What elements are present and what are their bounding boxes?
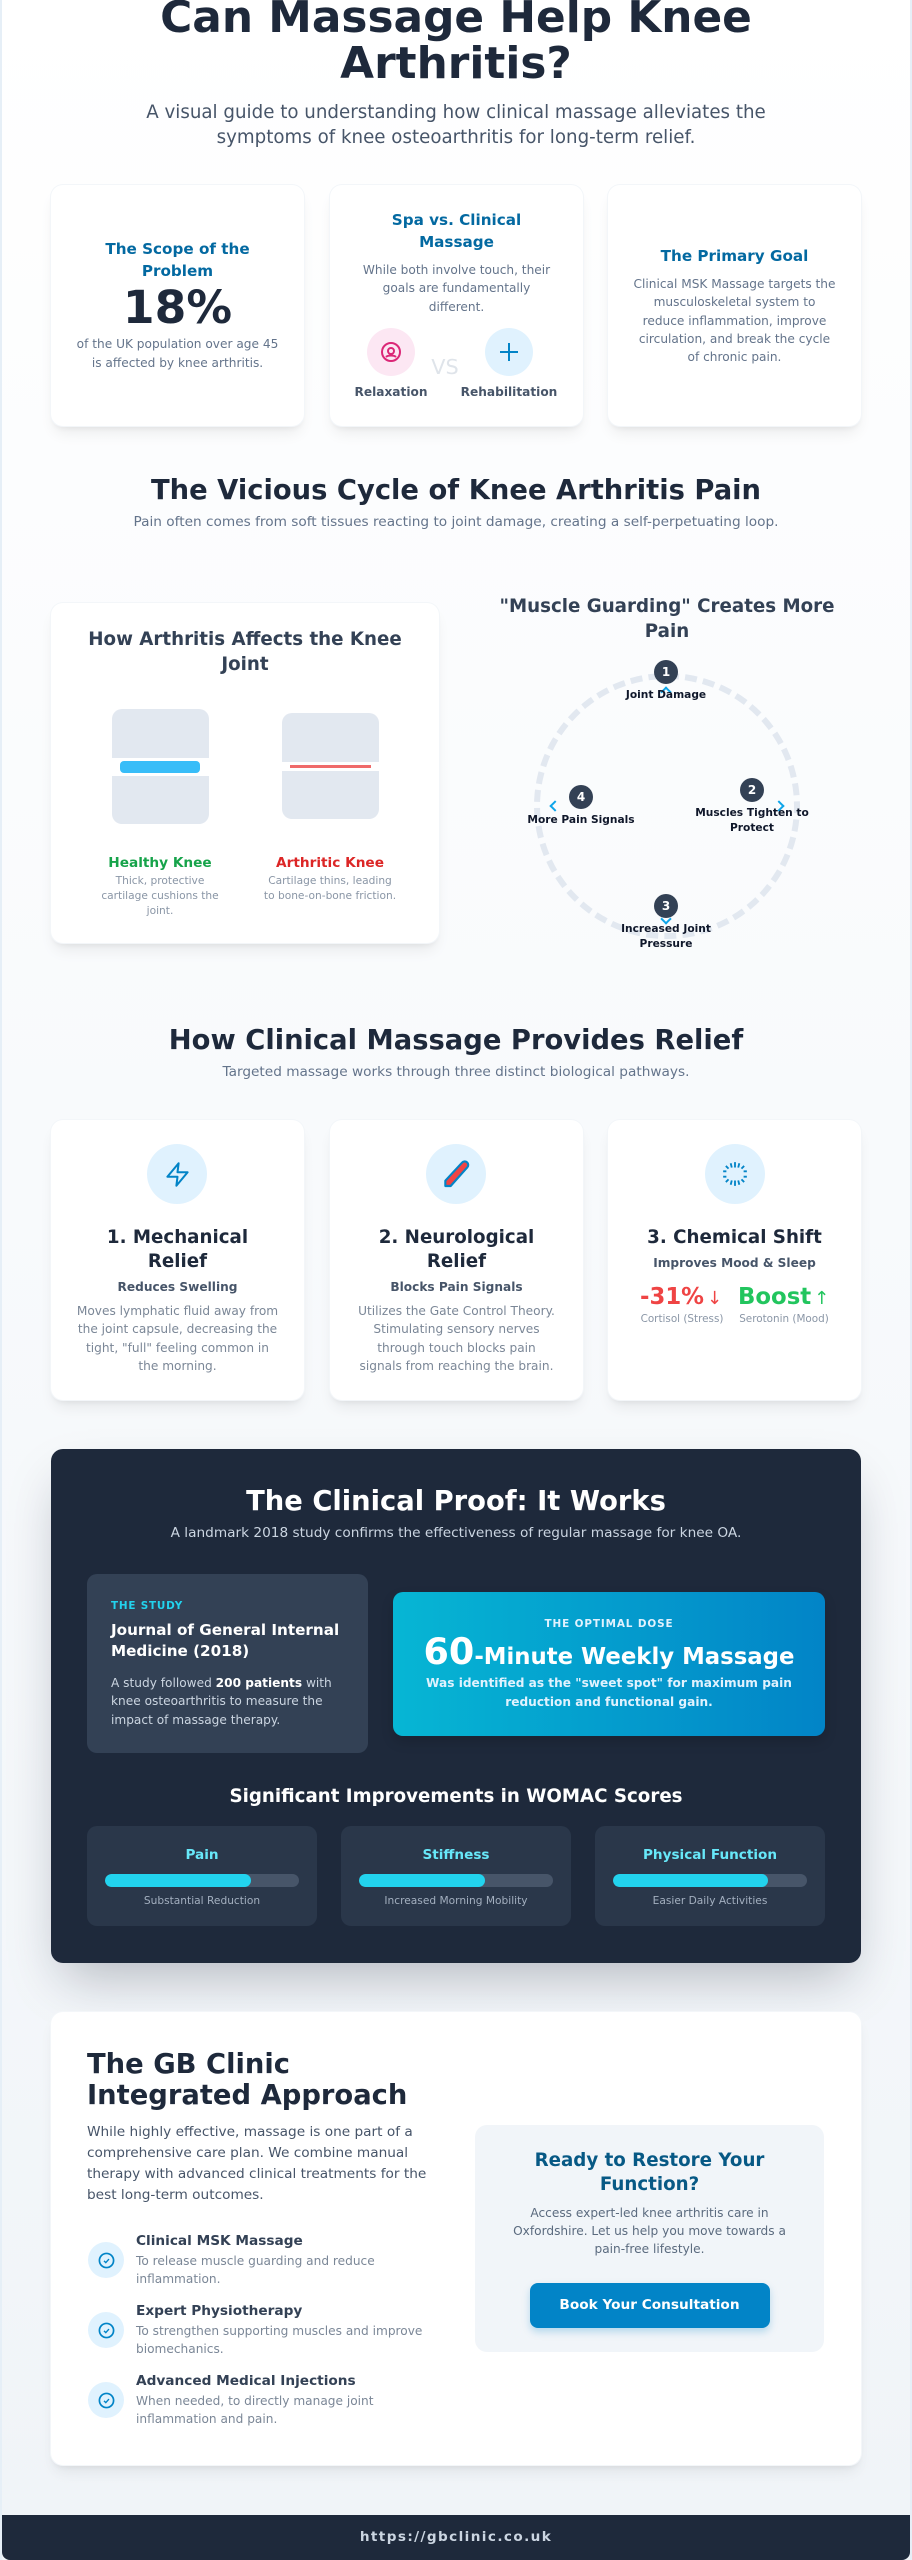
text: goal description bbox=[634, 277, 835, 364]
heading: journal: Journal of General Internal bbox=[111, 1620, 339, 1638]
statistic: 60-minute weekly massage: 60-Minute Weekly Massage bbox=[424, 1630, 794, 1673]
text: population: is affected by knee arthritis. bbox=[92, 356, 263, 370]
heading: ready to restore: Function? bbox=[600, 2174, 699, 2195]
metric: physical function: Easier Daily Activities bbox=[653, 1894, 767, 1907]
heading: vicious cycle: The Vicious Cycle of Knee Arthritis Pain bbox=[151, 475, 761, 506]
text: sweet spot bbox=[426, 1676, 792, 1708]
heading: clinical proof: The Clinical Proof: It Works bbox=[246, 1486, 666, 1517]
text: gate control: signals from reaching the brain. bbox=[360, 1359, 553, 1373]
stat: cortisol: -31%↓ bbox=[640, 1284, 722, 1310]
text: goals bbox=[363, 263, 550, 314]
step 3 label bbox=[621, 922, 711, 950]
text: lymphatic: tight, "full" feeling common in bbox=[86, 1341, 269, 1355]
step 2 label: Protect bbox=[730, 821, 774, 834]
step 1 node: 1 bbox=[662, 665, 670, 679]
arrow: left chevron bbox=[549, 800, 561, 812]
metric: pain bbox=[87, 1826, 317, 1926]
subheading: mood: Improves Mood & Sleep bbox=[653, 1256, 816, 1270]
heading: scope bbox=[105, 240, 250, 280]
label: arthritic knee: Arthritic Knee bbox=[276, 855, 384, 871]
panel: how arthritis affects the knee joint bbox=[51, 603, 439, 943]
metric: stiffness: Stiffness bbox=[422, 1847, 490, 1863]
text: access expert-led care: Oxfordshire. Let us help you move towards a bbox=[513, 2224, 786, 2238]
text: comprehensive care: therapy with advanced clinical treatments for the bbox=[87, 2166, 426, 2182]
metric: physical function bbox=[595, 1826, 825, 1926]
text: arthritic description: Cartilage thins, leading bbox=[268, 874, 392, 887]
heading: chemical shift: 3. Chemical Shift bbox=[647, 1227, 822, 1248]
heading: spa vs clinical bbox=[392, 211, 521, 251]
text: comprehensive care: best long-term outcomes. bbox=[87, 2187, 264, 2203]
text: access expert-led care: pain-free lifestyle. bbox=[594, 2242, 704, 2256]
list item: clinical MSK massage: Clinical MSK Massage bbox=[136, 2233, 303, 2249]
card: the optimal dose bbox=[393, 1592, 825, 1736]
step 4 label: More Pain Signals bbox=[527, 813, 635, 826]
arrow: right chevron bbox=[773, 800, 785, 812]
bar: stiffness 65% bbox=[359, 1874, 553, 1887]
heading: neurological relief: 2. Neurological bbox=[379, 1227, 534, 1248]
heading: mechanical relief bbox=[107, 1227, 248, 1272]
list item: advanced medical injections bbox=[88, 2373, 374, 2426]
list item: expert physiotherapy: biomechanics. bbox=[136, 2342, 224, 2356]
heading: ready to restore: Ready to Restore Your bbox=[535, 2150, 764, 2171]
text: lymphatic: the joint capsule, decreasing the bbox=[78, 1322, 277, 1336]
list item: advanced medical injections: inflammation and pain. bbox=[136, 2412, 277, 2426]
heading: integrated approach: Integrated Approach bbox=[87, 2080, 407, 2111]
text: gate control: Utilizes the Gate Control Theory. bbox=[358, 1304, 555, 1318]
text: comprehensive care bbox=[87, 2124, 426, 2203]
heading: ready to restore bbox=[535, 2150, 764, 2195]
text: healthy description: cartilage cushions the bbox=[101, 889, 219, 902]
list item: expert physiotherapy bbox=[88, 2303, 422, 2356]
heading: scope: The Scope of the bbox=[105, 240, 250, 258]
metric: physical function: Physical Function bbox=[643, 1847, 777, 1863]
panel: neurological relief bbox=[330, 1120, 583, 1400]
heading: muscle guarding: "Muscle Guarding" Creates More bbox=[499, 596, 835, 617]
step 2 label bbox=[695, 806, 809, 834]
subheading: reduces swelling: Reduces Swelling bbox=[118, 1280, 237, 1294]
heading: journal bbox=[110, 1620, 339, 1660]
icon: check bbox=[88, 2242, 124, 2278]
text: arthritic description bbox=[264, 874, 396, 902]
text: arthritic description: to bone-on-bone friction. bbox=[264, 889, 396, 902]
list item: clinical MSK massage: To release muscle guarding and reduce bbox=[136, 2254, 375, 2268]
heading: integrated approach: The GB Clinic bbox=[87, 2049, 290, 2080]
arrow: bottom chevron bbox=[660, 913, 672, 925]
text: healthy description bbox=[101, 874, 219, 917]
text: patients: A study followed 200 patients with bbox=[111, 1676, 332, 1690]
title bbox=[160, 0, 752, 88]
icon: pencil bbox=[426, 1144, 486, 1204]
metric: pain: Pain bbox=[185, 1847, 219, 1863]
text: patients: knee osteoarthritis to measure the bbox=[111, 1694, 323, 1708]
icon: lightning bbox=[147, 1144, 207, 1204]
step 1 label: Joint Damage bbox=[626, 688, 706, 701]
subtitle: A visual guide to understanding how clinical massage alleviates the bbox=[146, 102, 766, 123]
text: population: of the UK population over age 45 bbox=[77, 337, 278, 351]
step 3 label: Increased Joint bbox=[621, 922, 711, 935]
text: sweet spot: Was identified as the "sweet spot" for maximum pain bbox=[426, 1676, 792, 1690]
list item: clinical MSK massage: inflammation. bbox=[136, 2272, 220, 2286]
step 2 node bbox=[740, 778, 764, 802]
footer: https://gbclinic.co.uk bbox=[360, 2529, 552, 2545]
text: comprehensive care: While highly effective, massage is one part of a bbox=[87, 2124, 413, 2140]
step 3 node: 3 bbox=[662, 899, 670, 913]
label: relaxation: Relaxation bbox=[354, 385, 428, 399]
icon: check bbox=[88, 2382, 124, 2418]
text: comprehensive care: comprehensive care plan. We combine manual bbox=[87, 2145, 408, 2161]
step 2 label: Muscles Tighten to bbox=[695, 806, 809, 819]
heading: muscle guarding: Pain bbox=[645, 621, 689, 642]
diagram: pain cycle ring bbox=[527, 660, 809, 950]
icon: check bbox=[88, 2312, 124, 2348]
text: patients bbox=[111, 1676, 332, 1727]
label: the study: THE STUDY bbox=[111, 1600, 183, 1612]
subheading: blocks pain signals: Blocks Pain Signals bbox=[390, 1280, 523, 1294]
heading: muscle guarding bbox=[499, 596, 835, 642]
panel: clinical proof bbox=[51, 1449, 861, 1963]
metric: stiffness bbox=[341, 1826, 571, 1926]
subtitle bbox=[146, 102, 766, 148]
text: goal description: musculoskeletal system to bbox=[654, 295, 815, 309]
panel: mechanical relief bbox=[51, 1120, 304, 1400]
heading: knee joint: How Arthritis Affects the Knee bbox=[88, 629, 402, 650]
metric: pain: Substantial Reduction bbox=[144, 1894, 260, 1907]
step 4 node: 4 bbox=[577, 790, 585, 804]
list item: expert physiotherapy: To strengthen supporting muscles and improve bbox=[136, 2324, 422, 2338]
text: goal description: Clinical MSK Massage targets the bbox=[634, 277, 835, 291]
bar: physical function 80% bbox=[613, 1874, 807, 1887]
label: optimal dose: THE OPTIMAL DOSE bbox=[545, 1618, 673, 1630]
card: the study bbox=[87, 1574, 368, 1753]
illustration: healthy knee bbox=[112, 709, 209, 824]
text: goal description: circulation, and break the cycle bbox=[639, 332, 830, 346]
button: book your consultation: Book Your Consultation bbox=[559, 2297, 740, 2313]
panel: chemical shift bbox=[608, 1120, 861, 1400]
heading: knee joint: Joint bbox=[221, 654, 269, 674]
step 3 label: Pressure bbox=[640, 937, 692, 950]
text: lymphatic: Moves lymphatic fluid away from bbox=[77, 1304, 278, 1318]
list item: advanced medical injections: When needed, to directly manage joint bbox=[136, 2394, 374, 2408]
text: gate control bbox=[358, 1304, 555, 1373]
text: healthy description: joint. bbox=[147, 904, 173, 917]
step 4 node bbox=[569, 785, 593, 809]
illustration: arthritic knee bbox=[282, 713, 379, 819]
heading: primary goal: The Primary Goal bbox=[661, 247, 808, 265]
call to action panel bbox=[475, 2125, 824, 2352]
list item: advanced medical injections: Advanced Medical Injections bbox=[136, 2373, 356, 2389]
heading: knee joint bbox=[88, 629, 402, 674]
text: goal description: of chronic pain. bbox=[688, 350, 781, 364]
heading: relief: How Clinical Massage Provides Relief bbox=[169, 1025, 743, 1056]
text: patients: impact of massage therapy. bbox=[111, 1713, 280, 1727]
step 1 node bbox=[654, 660, 678, 684]
label: serotonin: Serotonin (Mood) bbox=[739, 1313, 829, 1325]
icon: rehabilitation plus bbox=[485, 328, 533, 376]
panel: the scope of the problem bbox=[51, 185, 304, 426]
subtitle: symptoms of knee osteoarthritis for long-term relief. bbox=[217, 127, 695, 148]
panel: integrated approach bbox=[51, 2012, 861, 2465]
text: access expert-led care: Access expert-led knee arthritis care in bbox=[530, 2206, 769, 2220]
step 2 node: 2 bbox=[748, 783, 756, 797]
text: goals: goals are fundamentally bbox=[383, 281, 530, 295]
button: book your consultation bbox=[530, 2283, 770, 2328]
statistic: 18%: 18% bbox=[123, 281, 232, 334]
label: rehabilitation: Rehabilitation bbox=[461, 385, 557, 399]
text: healthy description: Thick, protective bbox=[116, 874, 204, 887]
panel: spa vs clinical massage bbox=[330, 185, 583, 426]
heading: spa vs clinical: Spa vs. Clinical bbox=[392, 211, 521, 229]
text: sweet spot: reduction and functional gain. bbox=[505, 1694, 713, 1708]
list item: clinical MSK massage bbox=[88, 2233, 375, 2286]
footer bbox=[2, 2515, 910, 2560]
subheading: vicious cycle: Pain often comes from soft tissues reacting to joint damage, creating a self-perpetuating loop. bbox=[133, 514, 779, 530]
text: population bbox=[77, 337, 278, 370]
bar: pain 75% bbox=[105, 1874, 299, 1887]
text: gate control: through touch blocks pain bbox=[377, 1341, 536, 1355]
heading: WOMAC: Significant Improvements in WOMAC Scores bbox=[229, 1786, 683, 1807]
text: goal description: reduce inflammation, improve bbox=[643, 314, 826, 328]
subheading: landmark study: A landmark 2018 study confirms the effectiveness of regular massage for knee OA. bbox=[171, 1525, 741, 1541]
panel: the primary goal bbox=[608, 185, 861, 426]
text: VS: VS bbox=[431, 355, 459, 379]
text: lymphatic bbox=[77, 1304, 278, 1373]
label: cortisol: Cortisol (Stress) bbox=[641, 1313, 723, 1325]
text: goals: While both involve touch, their bbox=[363, 263, 550, 277]
heading: journal: Medicine (2018) bbox=[111, 1642, 249, 1660]
stat: serotonin: Boost↑ bbox=[738, 1284, 829, 1310]
heading: neurological relief: Relief bbox=[427, 1251, 486, 1272]
text: goals: different. bbox=[429, 300, 484, 314]
metric: stiffness: Increased Morning Mobility bbox=[384, 1894, 528, 1907]
text: gate control: Stimulating sensory nerves bbox=[373, 1322, 540, 1336]
text: access expert-led care bbox=[513, 2206, 786, 2256]
list item: expert physiotherapy: Expert Physiotherapy bbox=[136, 2303, 302, 2319]
heading: mechanical relief: 1. Mechanical bbox=[107, 1227, 248, 1248]
icon: relaxation target bbox=[367, 328, 415, 376]
heading: scope: Problem bbox=[142, 262, 213, 280]
subheading: relief: Targeted massage works through three distinct biological pathways. bbox=[222, 1064, 690, 1080]
heading: spa vs clinical: Massage bbox=[419, 233, 494, 251]
heading: integrated approach bbox=[87, 2049, 407, 2111]
arrow: top chevron bbox=[660, 686, 672, 698]
heading: mechanical relief: Relief bbox=[148, 1251, 207, 1272]
label: healthy knee: Healthy Knee bbox=[108, 855, 212, 871]
step 3 node bbox=[654, 894, 678, 918]
icon: sparkle ticks bbox=[705, 1144, 765, 1204]
title: Arthritis? bbox=[340, 38, 572, 88]
heading: neurological relief bbox=[379, 1227, 534, 1272]
text: lymphatic: the morning. bbox=[138, 1359, 217, 1373]
